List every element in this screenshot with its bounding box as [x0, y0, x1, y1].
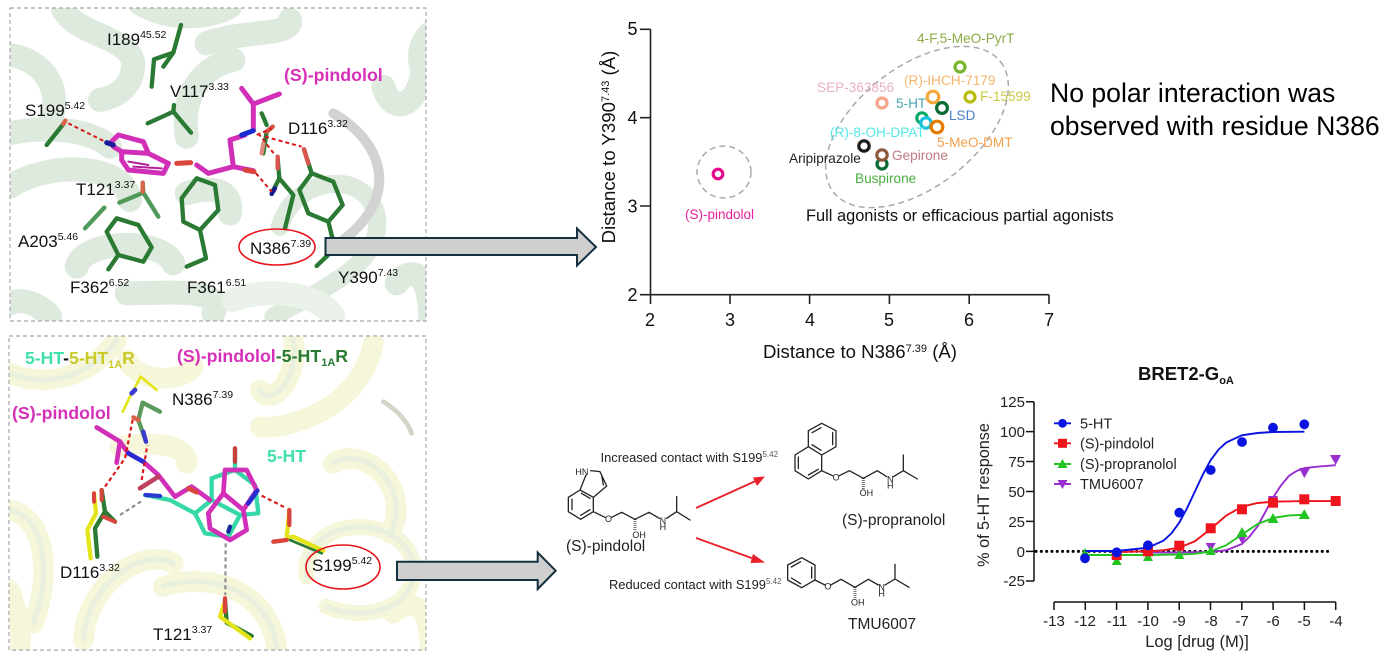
caption: reduced contact: 5.42 [766, 577, 782, 586]
x tick labels: -10 [1137, 613, 1159, 630]
chart title: oA [1219, 375, 1234, 387]
dose-response chart: BRET2-GoA [975, 363, 1343, 651]
label: F361: 6.51 [226, 277, 246, 289]
label: A203: A203 [18, 232, 58, 251]
legend: TMU6007 [1080, 477, 1144, 493]
y tick labels [1000, 394, 1025, 590]
label: F362: F362 [70, 278, 109, 297]
x axis title: Log [drug (M)] [1145, 633, 1249, 651]
arrow: S199 to chemical analogues [397, 552, 556, 589]
label: N386: 7.39 [291, 238, 311, 250]
structure: (S)-pindolol: O [605, 514, 612, 524]
x tick labels: -12 [1074, 613, 1096, 630]
point labels: (S)-pindolol [685, 207, 754, 222]
label: N386: 7.39 [213, 389, 233, 401]
curve: 5-HT [1080, 419, 1309, 563]
y axis title: % of 5-HT response [975, 423, 993, 567]
(S)-pindolol ligand sticks [97, 427, 257, 540]
highlight ellipse: S199 [306, 545, 380, 589]
point labels: 5-MeO-DMT [937, 135, 1013, 150]
label: (S)-pindolol: (S)-pindolol [12, 403, 111, 423]
y tick labels: 25 [1008, 514, 1025, 531]
point labels: (R)-8-OH-DPAT [830, 125, 925, 140]
contacts [105, 417, 287, 595]
dashed group ellipses [697, 14, 1037, 240]
legend: 5-HT [1080, 416, 1112, 432]
residue atom tips [63, 121, 308, 194]
arrow: N386 to distance plot [326, 228, 596, 266]
y tick labels: 100 [1000, 424, 1025, 441]
curve: TMU6007 [1148, 455, 1341, 553]
curve: (S)-propranolol [1080, 509, 1310, 565]
point labels: 4-F,5-MeO-PyrT [917, 31, 1014, 46]
point labels [685, 31, 1031, 222]
label: D116: 3.32 [99, 562, 120, 574]
legend heading: (S)-pindolol-5-HT1AR: (S)-pindolol-5-HT [177, 346, 321, 366]
y tick labels [627, 19, 638, 305]
caption: increased contact: Increased contact with S199 [600, 450, 762, 465]
point labels: SEP-363856 [817, 80, 894, 95]
panel frame [10, 8, 426, 321]
structure: TMU6007 [788, 558, 909, 607]
label: S199: S199 [25, 101, 65, 120]
point labels: Aripiprazole [789, 151, 861, 166]
y axis title: (Å) [598, 51, 619, 81]
receptor residues [47, 25, 343, 269]
structure: (S)-pindolol: N [660, 516, 666, 526]
label: T121: T121 [153, 625, 192, 644]
legend heading: (S)-pindolol-5-HT1AR: R [335, 346, 348, 366]
y tick labels: 2 [627, 285, 638, 305]
scatter chart: distances to N386 and Y390 [598, 14, 1114, 362]
label: T121: 3.37 [192, 624, 212, 636]
y tick labels: 5 [627, 19, 638, 39]
x tick labels: -9 [1172, 613, 1186, 630]
panel frame [9, 336, 426, 650]
polar contacts [68, 123, 302, 192]
x tick labels: -11 [1107, 613, 1127, 630]
5-HT ligand sticks [145, 448, 258, 537]
data points [713, 62, 975, 179]
residues yellow and green [87, 377, 323, 638]
label: (S)-propranolol: (S)-propranolol [842, 512, 945, 529]
legend: (S)-propranolol [1080, 457, 1177, 473]
structure: TMU6007: OH [851, 597, 864, 607]
x tick labels: -5 [1297, 613, 1311, 630]
arrow: to TMU6007 [696, 538, 765, 563]
caption: increased contact: 5.42 [762, 450, 779, 459]
x tick labels [1043, 613, 1343, 630]
(S)-pindolol ligand sticks [107, 88, 279, 173]
note text: No polar interaction was [1050, 78, 1335, 108]
label: N386: N386 [172, 390, 213, 409]
x axis title: Distance to N386 [763, 341, 906, 362]
structure: (S)-pindolol [568, 467, 690, 540]
x tick labels: -4 [1329, 613, 1343, 630]
legend heading: 5-HT-5-HT1AR: 1A [108, 359, 122, 371]
label: S199: 5.42 [352, 555, 372, 567]
highlight ellipse: N386 [239, 229, 315, 265]
label: I189: I189 [107, 30, 140, 49]
label: D116: 3.32 [327, 118, 348, 130]
group caption: Full agonists or efficacious partial agonists [806, 207, 1114, 225]
label: V117: 3.33 [208, 81, 229, 93]
label: TMU6007: TMU6007 [848, 616, 916, 633]
y tick labels: 3 [627, 196, 638, 216]
panel: (S)-pindolol binding pocket [10, 3, 430, 321]
legend heading: (S)-pindolol-5-HT1AR: 1A [321, 357, 335, 369]
label: F362: 6.52 [109, 277, 129, 289]
x tick labels: -13 [1043, 613, 1065, 630]
point labels: (R)-IHCH-7179 [904, 73, 995, 88]
structure: (S)-propranolol: OH [860, 488, 873, 498]
y axis title: Distance to Y390 [598, 102, 619, 243]
point labels: 5-HT [896, 96, 926, 111]
label: A203: 5.46 [58, 231, 78, 243]
x tick labels: 6 [964, 310, 974, 330]
x tick labels: -6 [1266, 613, 1280, 630]
structure: (S)-pindolol: H [660, 522, 666, 532]
y tick labels: 50 [1008, 484, 1025, 501]
chemical structures [566, 423, 945, 633]
axes [640, 29, 1049, 304]
y axis title: 7.43 [600, 81, 612, 102]
structure: (S)-propranolol: N [887, 474, 893, 484]
x tick labels: 2 [645, 310, 655, 330]
point labels: Buspirone [855, 171, 916, 186]
label: S199: 5.42 [65, 100, 85, 112]
structure: (S)-propranolol [795, 423, 917, 498]
label: Y390: 7.43 [378, 267, 398, 279]
x axis title: (Å) [927, 341, 957, 362]
y tick labels: 125 [1000, 394, 1025, 411]
zero reference line [1036, 550, 1332, 553]
structure: TMU6007: O [824, 581, 831, 591]
note text: observed with residue N386 [1050, 111, 1380, 141]
structure: (S)-propranolol: O [833, 472, 840, 482]
curve: (S)-pindolol [1112, 494, 1341, 560]
y tick labels: 0 [1017, 544, 1025, 561]
x tick labels: -7 [1235, 613, 1249, 630]
label: S199: S199 [312, 556, 352, 575]
panel: superposition of 5-HT and (S)-pindolol [9, 336, 430, 650]
label: I189: 45.52 [140, 29, 167, 41]
x tick labels: 4 [805, 310, 815, 330]
label: F361: F361 [187, 278, 226, 297]
x tick labels: 7 [1044, 310, 1054, 330]
y tick labels: 4 [627, 108, 638, 128]
structure: (S)-propranolol: H [887, 480, 893, 490]
point labels: Gepirone [892, 148, 948, 163]
label: 5-HT: 5-HT [267, 446, 306, 466]
note text [1050, 78, 1380, 141]
label: T121: 3.37 [115, 179, 135, 191]
structure: (S)-pindolol: HN [575, 467, 588, 477]
y tick labels: -25 [1003, 573, 1025, 590]
label: (S)-pindolol: (S)-pindolol [284, 65, 383, 85]
label: N386: N386 [250, 239, 291, 258]
legend heading: 5-HT-5-HT1AR: 5-HT-5-HT [25, 348, 108, 368]
x tick labels: 5 [884, 310, 894, 330]
point labels: LSD [949, 108, 976, 123]
x tick labels [645, 310, 1054, 330]
label: D116: D116 [60, 563, 99, 582]
legend heading: 5-HT-5-HT1AR: R [122, 348, 135, 368]
x tick labels: -8 [1204, 613, 1218, 630]
structure: (S)-pindolol: OH [632, 530, 646, 540]
label: Y390: Y390 [338, 268, 378, 287]
label: T121: T121 [76, 180, 115, 199]
structure: TMU6007: H [878, 589, 885, 599]
label: (S)-pindolol: (S)-pindolol [566, 538, 645, 555]
x tick labels: 3 [725, 310, 735, 330]
chart title: BRET2-G [1138, 363, 1219, 384]
legend: (S)-pindolol [1080, 436, 1154, 452]
arrow: to (S)-propranolol [696, 476, 765, 508]
x axis title: 7.39 [906, 343, 927, 355]
caption: reduced contact: Reduced contact with S199 [609, 577, 766, 592]
axes [1026, 402, 1336, 610]
point labels: F-15599 [980, 89, 1031, 104]
label: V117: V117 [170, 82, 208, 101]
structure: TMU6007: N [878, 583, 885, 593]
label: D116: D116 [288, 119, 327, 138]
legend [1054, 416, 1177, 493]
y tick labels: 75 [1008, 454, 1025, 471]
